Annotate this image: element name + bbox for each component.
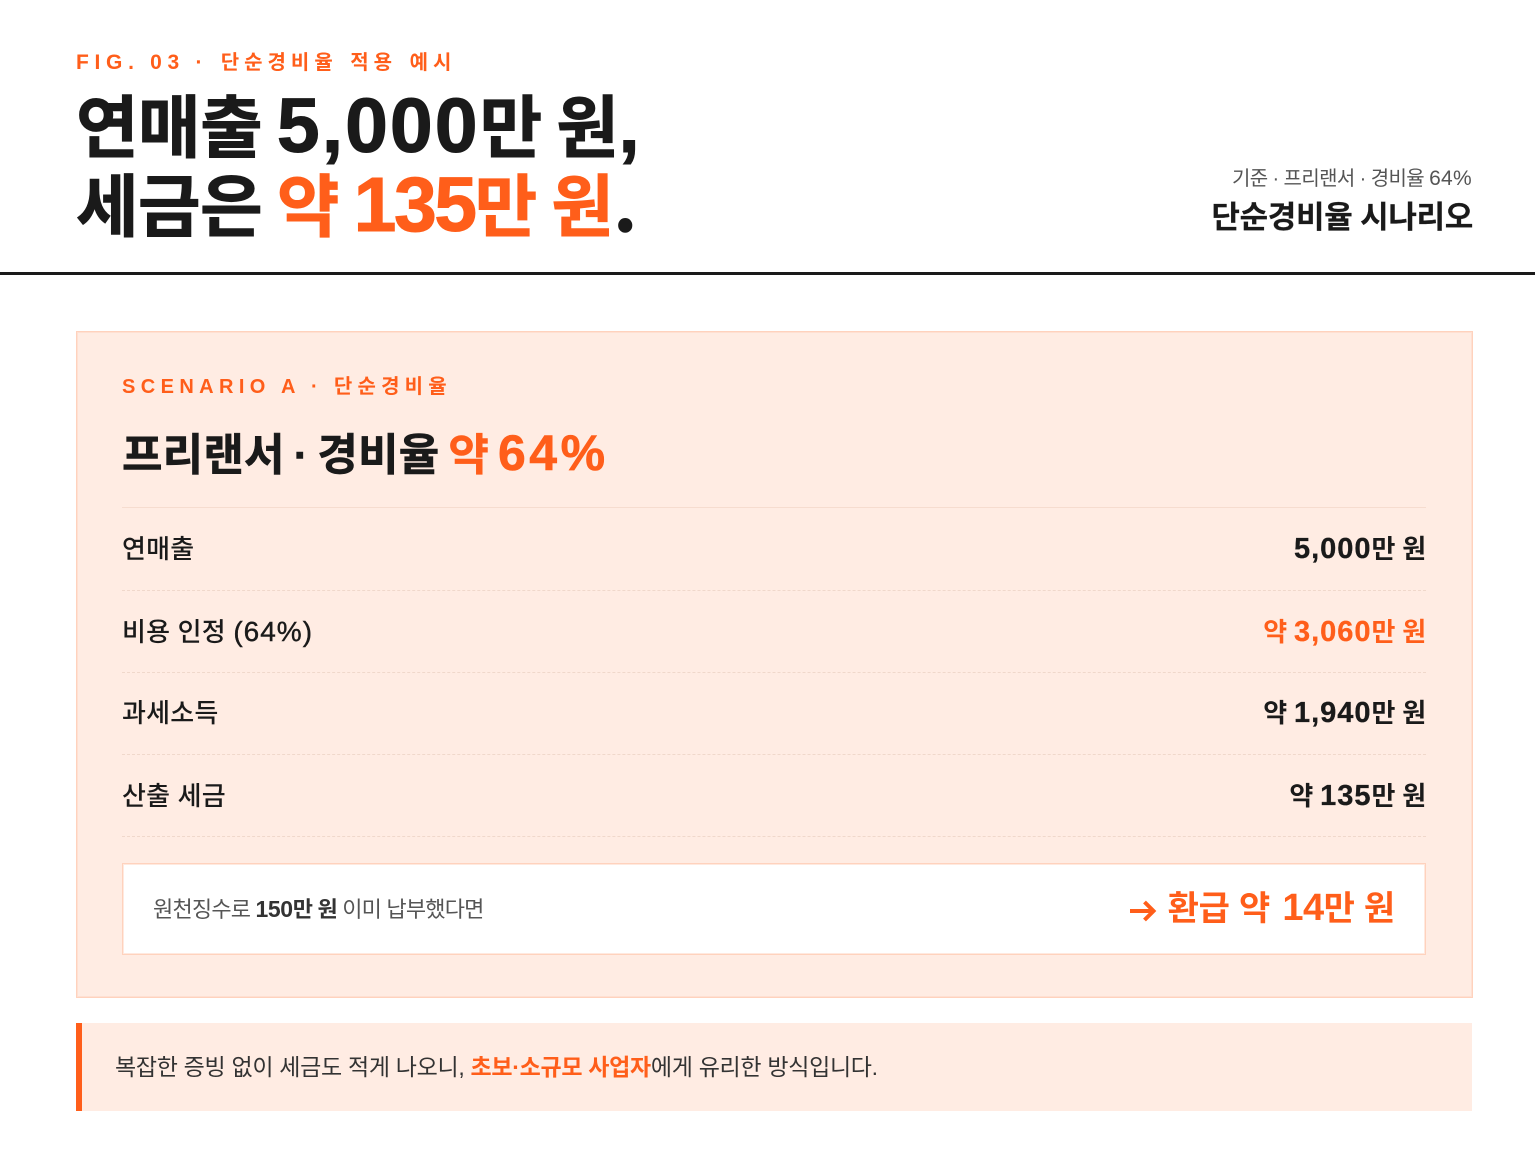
row: revenue: 연매출: [122, 534, 194, 564]
eyebrow label: FIG. 03 · 단순경비율 적용 예시: [76, 51, 456, 74]
accent bar: [76, 1023, 82, 1111]
row: taxable income: 약 1,940만 원: [1263, 697, 1426, 729]
main title: [76, 83, 642, 252]
conclusion text: 복잡한 증빙 없이 세금도 적게 나오니, 초보·소규모 사업자에게 유리한 방식입니다.: [115, 1054, 878, 1080]
row: expense: 비용 인정 (64%): [122, 616, 313, 647]
conclusion box: [76, 1023, 1472, 1111]
row: tax: 약 135만 원: [1289, 780, 1426, 812]
row: taxable income: 과세소득: [122, 698, 218, 728]
withheld note: 원천징수로 150만 원 이미 납부했다면: [153, 896, 484, 922]
scenario basis note: 기준 · 프리랜서 · 경비율 64%: [1232, 167, 1472, 190]
row: taxable income: [122, 697, 1426, 729]
panel heading: 프리랜서 · 경비율 약 64%: [122, 425, 609, 481]
header rule: [0, 272, 1535, 275]
row: expense: [122, 616, 1426, 648]
main title: 연매출 5,000만 원,: [76, 83, 642, 169]
icon: arrow: [1130, 900, 1156, 922]
row: revenue: 5,000만 원: [1294, 533, 1426, 565]
panel eyebrow: SCENARIO A · 단순경비율: [122, 376, 452, 398]
row: revenue: [122, 533, 1426, 565]
top divider: [122, 507, 1426, 508]
refund box: [122, 863, 1426, 955]
refund amount: 환급 약 14만 원: [1168, 887, 1395, 929]
row: tax: 산출 세금: [122, 781, 226, 811]
row: tax: [122, 780, 1426, 812]
scenario name: 단순경비율 시나리오: [1211, 200, 1473, 235]
panel: scenario A: [76, 331, 1473, 998]
main title: 세금은 약 135만 원.: [76, 147, 637, 252]
row: expense: 약 3,060만 원: [1263, 616, 1426, 648]
